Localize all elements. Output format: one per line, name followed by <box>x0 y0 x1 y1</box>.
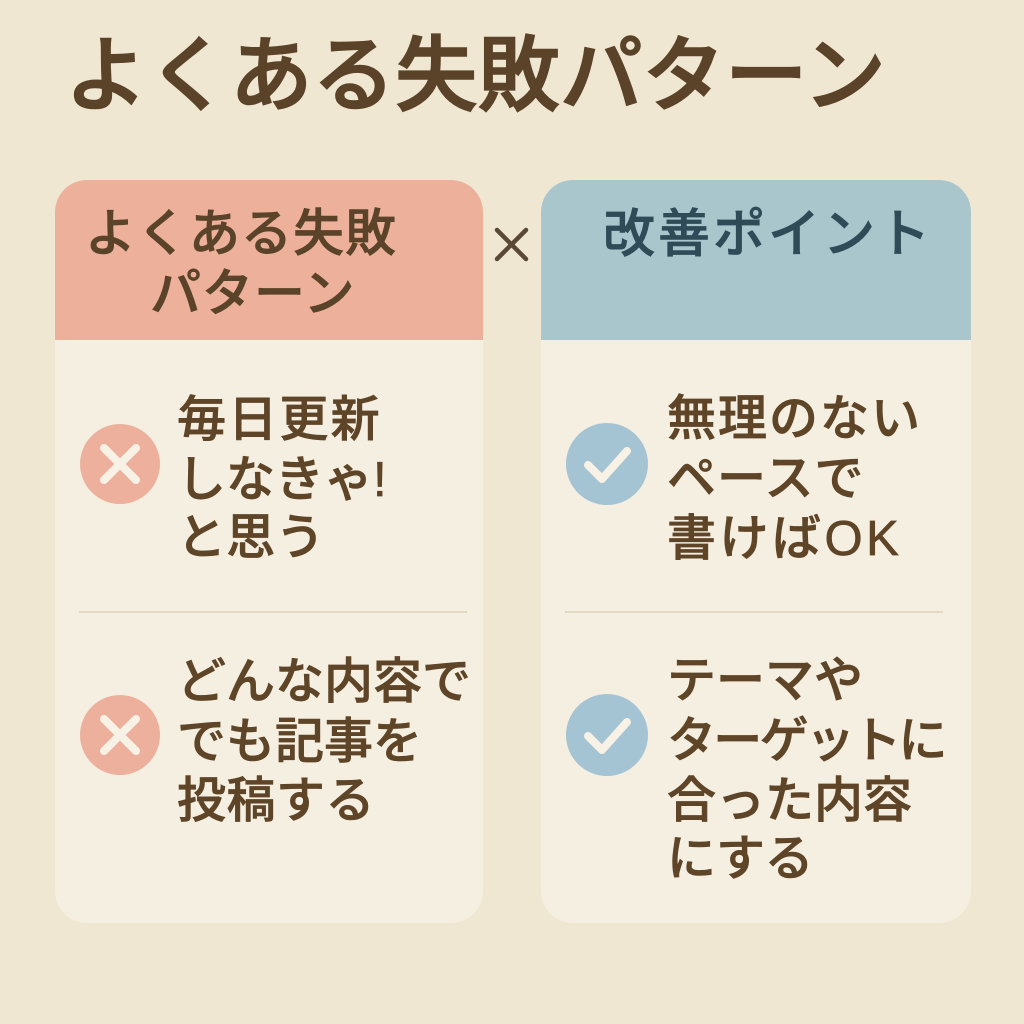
failure text 2: どんな内容で <box>177 655 471 709</box>
failure text 1 <box>177 393 387 565</box>
divider <box>565 611 943 613</box>
panel: improvement points <box>541 180 971 923</box>
improvement text 1: 書けばOK <box>667 512 902 566</box>
icon: cross 1 <box>80 424 160 504</box>
improvement text 2: にする <box>667 832 813 886</box>
failure text 1: と思う <box>177 511 325 565</box>
improvement text 2: 合った内容 <box>667 774 912 828</box>
header: improvement points: 改善ポイント <box>603 206 933 264</box>
improvement text 2 <box>667 654 945 886</box>
failure text 2: 投稿する <box>177 774 375 828</box>
icon: check 2 <box>566 694 648 776</box>
divider <box>79 611 467 613</box>
improvement text 1 <box>667 392 922 566</box>
failure text 1: 毎日更新 <box>177 393 382 447</box>
header: improvement points <box>541 180 971 340</box>
header: common failures: よくある失敗 <box>85 205 397 262</box>
improvement text 1: ペースで <box>667 452 865 506</box>
multiply sign <box>494 228 528 262</box>
icon: check 1 <box>566 423 648 505</box>
improvement text 2: ターゲットに <box>667 714 945 768</box>
header: common failures: パターン <box>150 265 355 322</box>
icon: cross 2 <box>80 695 160 775</box>
failure text 2 <box>177 655 471 828</box>
failure text 1: しなきゃ! <box>177 453 387 507</box>
improvement text 2: テーマや <box>667 654 863 708</box>
improvement text 1: 無理のない <box>667 392 922 446</box>
header: common failures <box>55 180 483 340</box>
panel: common failures <box>55 180 483 923</box>
failure text 2: でも記事を <box>177 715 422 769</box>
title: よくある失敗パターン <box>65 30 886 122</box>
